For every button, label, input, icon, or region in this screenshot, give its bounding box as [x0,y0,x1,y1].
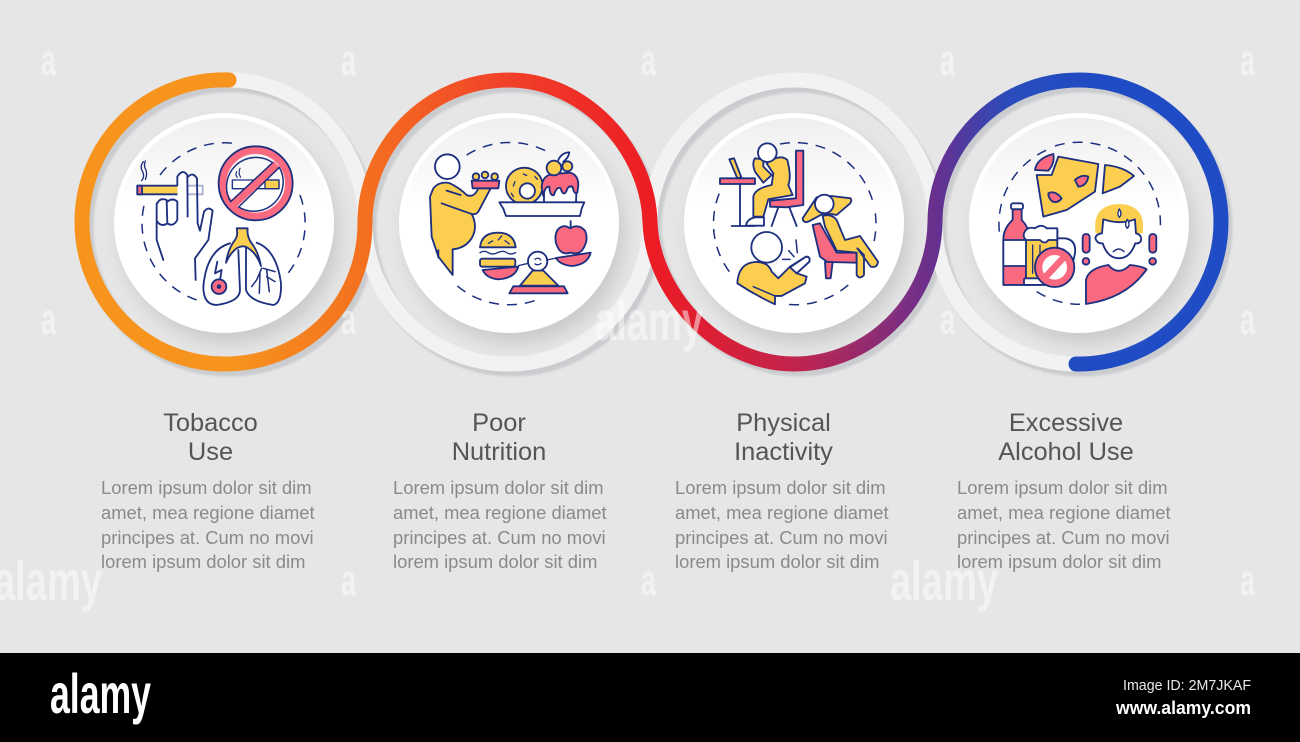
watermarks: a [41,36,56,85]
watermarks: a [1240,556,1255,605]
text block: physical inactivity: Lorem ipsum dolor sit dim [675,477,886,498]
panel: physical inactivity [684,113,904,333]
panel: excessive alcohol use [969,113,1189,333]
text block: poor nutrition: Lorem ipsum dolor sit dim [393,477,604,498]
heading: poor nutrition: Poor [472,409,526,437]
watermarks: a [940,36,955,85]
text block: excessive alcohol use: principes at. Cum no movi [957,527,1170,548]
watermarks: a [641,36,656,85]
heading: tobacco use: Use [188,438,233,466]
ring shadows [86,85,1225,369]
text block: tobacco use: lorem ipsum dolor sit dim [101,551,305,572]
panel: tobacco use [114,113,334,333]
heading: excessive alcohol use: Alcohol Use [998,438,1134,466]
watermarks: a [1240,36,1255,85]
disc shadows [121,125,1194,343]
text block: physical inactivity: principes at. Cum no movi [675,527,888,548]
text block: tobacco use: Lorem ipsum dolor sit dim [101,477,312,498]
image id: Image ID: 2M7JKAF [1123,677,1251,694]
heading: physical inactivity: Inactivity [734,438,833,466]
text block: physical inactivity: lorem ipsum dolor sit dim [675,551,879,572]
watermarks: a [341,295,356,344]
text block: tobacco use: principes at. Cum no movi [101,527,314,548]
watermarks: a [641,556,656,605]
text block: poor nutrition: amet, mea regione diamet [393,502,607,523]
gradient ribbon connecting the four circles [82,80,1221,364]
panel: poor nutrition [399,113,619,333]
website: www.alamy.com [1115,698,1251,718]
icon: overeating and food scale [430,142,591,305]
watermarks: a [1240,295,1255,344]
text block: excessive alcohol use: amet, mea regione diamet [957,502,1171,523]
heading: physical inactivity: Physical [736,409,831,437]
watermarks: a [41,295,56,344]
watermarks [0,36,1255,612]
text block: excessive alcohol use: Lorem ipsum dolor sit dim [957,477,1168,498]
icon: sedentary people [713,143,878,305]
watermarks: alamy [595,289,703,352]
pale ring track [229,80,1079,364]
text block: excessive alcohol use: lorem ipsum dolor sit dim [957,551,1161,572]
text block: tobacco use: amet, mea regione diamet [101,502,315,523]
watermarks: a [341,556,356,605]
heading: poor nutrition: Nutrition [452,438,546,466]
text block: physical inactivity: amet, mea regione diamet [675,502,889,523]
footer bar [0,653,1300,742]
heading: tobacco use: Tobacco [163,409,258,437]
heading: excessive alcohol use: Excessive [1009,409,1123,437]
text block: poor nutrition: lorem ipsum dolor sit dim [393,551,597,572]
logo: alamy: alamy [50,662,151,725]
watermarks: a [341,36,356,85]
watermarks: a [940,295,955,344]
text block: poor nutrition: principes at. Cum no movi [393,527,606,548]
icon: alcohol and liver damage [999,142,1160,304]
watermarks: alamy [890,549,998,612]
icon: smoking and lungs [137,143,305,305]
